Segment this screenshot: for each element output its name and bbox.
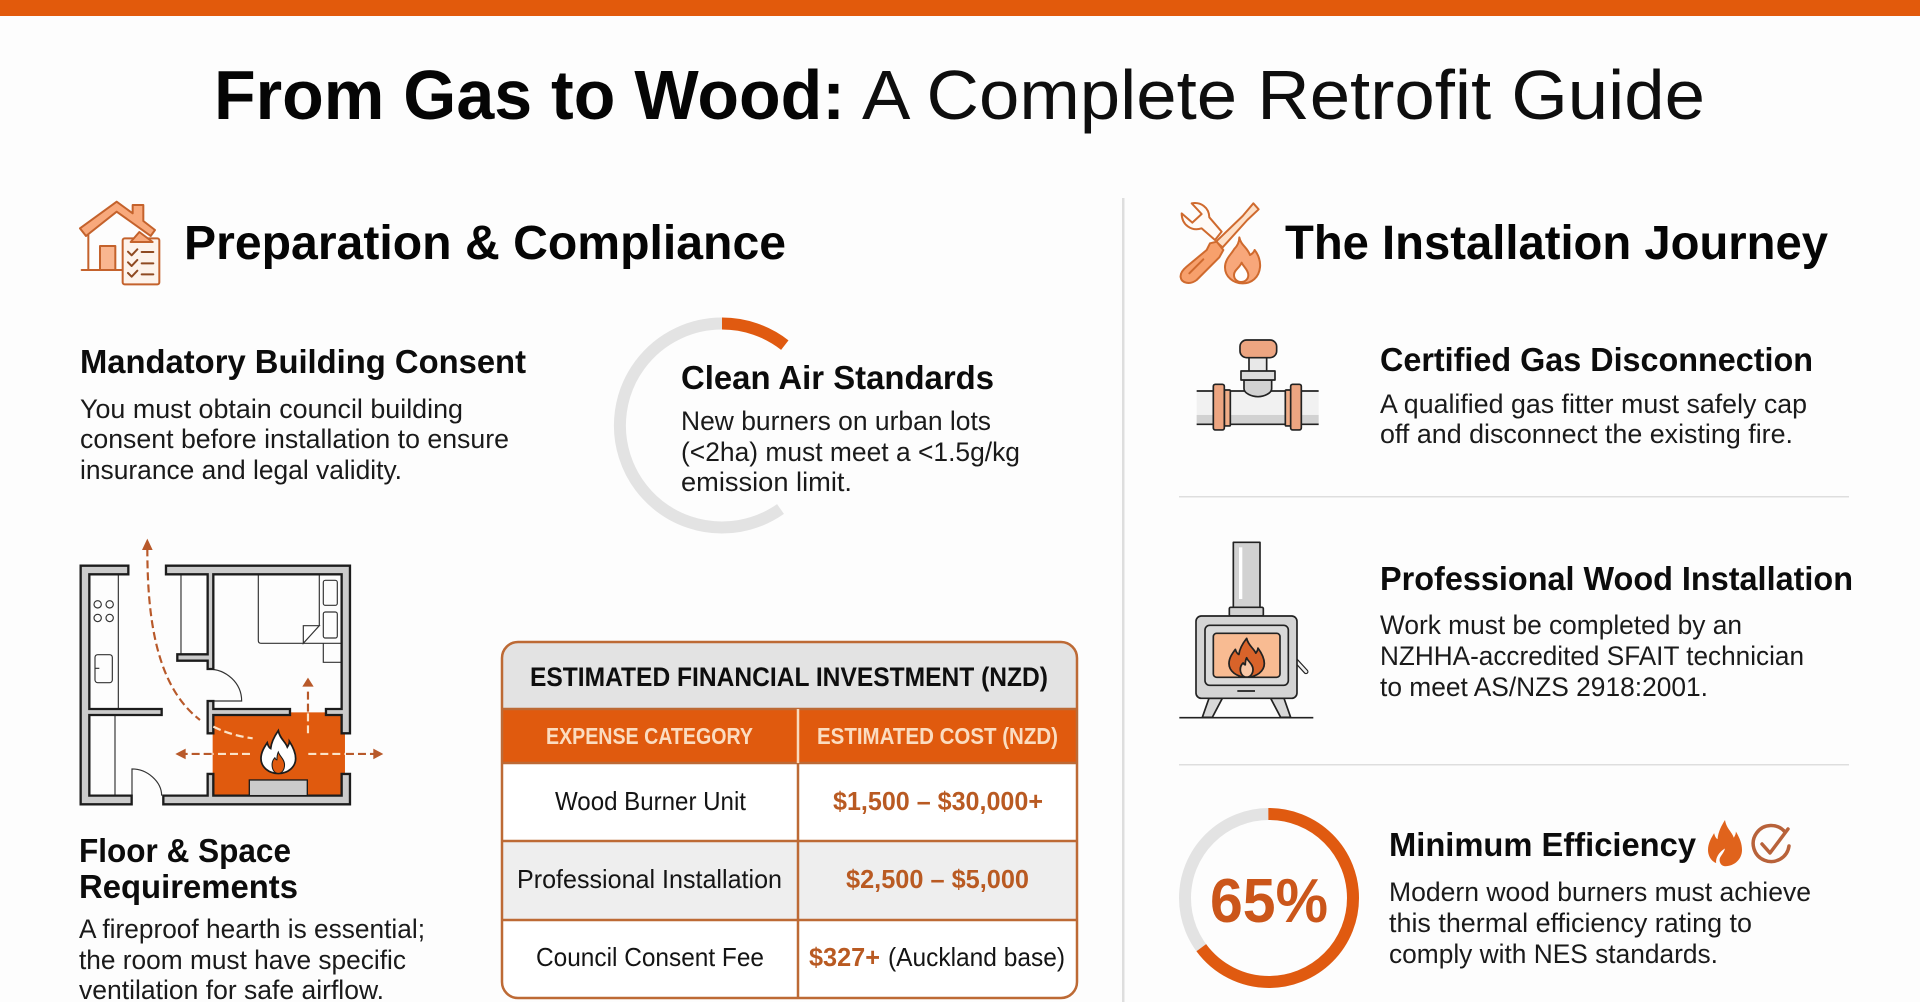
text block: clean air standards: Clean Air Standards bbox=[681, 359, 994, 396]
text block: certified gas disconnection: Certified Gas Disconnection bbox=[1380, 341, 1813, 378]
panel: installation journey bbox=[1179, 203, 1853, 982]
table: estimated financial investment: Professional Installation bbox=[517, 864, 782, 894]
table: estimated financial investment: $1,500 – $30,000+ bbox=[833, 786, 1043, 816]
floor plan diagram bbox=[81, 539, 383, 804]
panel: preparation and compliance bbox=[79, 202, 1077, 1002]
text block: certified gas disconnection: A qualified gas fitter must safely cap bbox=[1380, 389, 1807, 419]
top accent bar bbox=[0, 0, 1920, 16]
table: estimated financial investment bbox=[502, 642, 1077, 998]
text block: floor and space requirements: Requirements bbox=[79, 868, 298, 905]
text block: professional wood installation: to meet AS/NZS 2918:2001. bbox=[1380, 672, 1708, 702]
icon: small flame bbox=[1708, 820, 1742, 866]
text block: mandatory building consent bbox=[80, 343, 526, 485]
text block: floor and space requirements bbox=[79, 832, 425, 1002]
title bbox=[214, 56, 1705, 134]
table: estimated financial investment: (Auckland base) bbox=[888, 942, 1065, 972]
text block: minimum efficiency: Modern wood burners must achieve bbox=[1389, 877, 1811, 907]
icon: crossed tools and flame bbox=[1181, 203, 1260, 283]
text block: professional wood installation: Professional Wood Installation bbox=[1380, 560, 1853, 597]
table: estimated financial investment: $327+ bbox=[809, 942, 880, 972]
text block: minimum efficiency: this thermal efficiency rating to bbox=[1389, 908, 1752, 938]
chart: clean air arc bbox=[620, 323, 785, 527]
table: estimated financial investment: EXPENSE CATEGORY bbox=[546, 723, 753, 749]
title: From Gas to Wood: bbox=[214, 56, 845, 134]
icon: wood stove bbox=[1179, 542, 1313, 718]
title: A Complete Retrofit Guide bbox=[862, 56, 1705, 134]
table: estimated financial investment: Council Consent Fee bbox=[536, 942, 764, 972]
text block: professional wood installation: Work must be completed by an bbox=[1380, 610, 1742, 640]
table: estimated financial investment: ESTIMATED COST (NZD) bbox=[817, 723, 1058, 749]
icon: check circle bbox=[1753, 826, 1789, 862]
text block: clean air standards: (<2ha) must meet a <1.5g/kg bbox=[681, 437, 1020, 467]
text block: floor and space requirements: Floor & Space bbox=[79, 832, 291, 869]
text block: floor and space requirements: A fireproof hearth is essential; bbox=[79, 914, 425, 944]
text block: clean air standards: emission limit. bbox=[681, 467, 852, 497]
text block: minimum efficiency: Minimum Efficiency bbox=[1389, 826, 1697, 863]
text block: minimum efficiency: comply with NES standards. bbox=[1389, 939, 1718, 969]
text block: professional wood installation: NZHHA-accredited SFAIT technician bbox=[1380, 641, 1804, 671]
table: estimated financial investment: $2,500 – $5,000 bbox=[846, 864, 1029, 894]
text block: clean air standards: New burners on urban lots bbox=[681, 406, 991, 436]
text block: clean air standards bbox=[681, 359, 1020, 497]
icon: gas pipe valve bbox=[1197, 340, 1319, 430]
heading: preparation and compliance: Preparation & Compliance bbox=[184, 217, 786, 270]
text block: certified gas disconnection: off and disconnect the existing fire. bbox=[1380, 419, 1793, 449]
text block: minimum efficiency bbox=[1389, 826, 1811, 969]
column divider bbox=[1122, 198, 1124, 1002]
text block: mandatory building consent: You must obtain council building bbox=[80, 394, 463, 424]
table: estimated financial investment: ESTIMATED FINANCIAL INVESTMENT (NZD) bbox=[530, 662, 1048, 692]
text block: mandatory building consent: insurance and legal validity. bbox=[80, 455, 402, 485]
text block: mandatory building consent: Mandatory Building Consent bbox=[80, 343, 526, 380]
text block: floor and space requirements: the room must have specific bbox=[79, 945, 406, 975]
heading: the installation journey: The Installation Journey bbox=[1285, 217, 1828, 270]
icon: house with checklist bbox=[80, 202, 159, 284]
text block: professional wood installation bbox=[1380, 560, 1853, 702]
chart: 65 percent efficiency ring bbox=[1185, 814, 1353, 982]
text block: certified gas disconnection bbox=[1380, 341, 1813, 449]
text block: mandatory building consent: consent before installation to ensure bbox=[80, 424, 509, 454]
chart: 65 percent efficiency ring: 65% bbox=[1210, 867, 1328, 936]
table: estimated financial investment: Wood Burner Unit bbox=[555, 786, 747, 816]
